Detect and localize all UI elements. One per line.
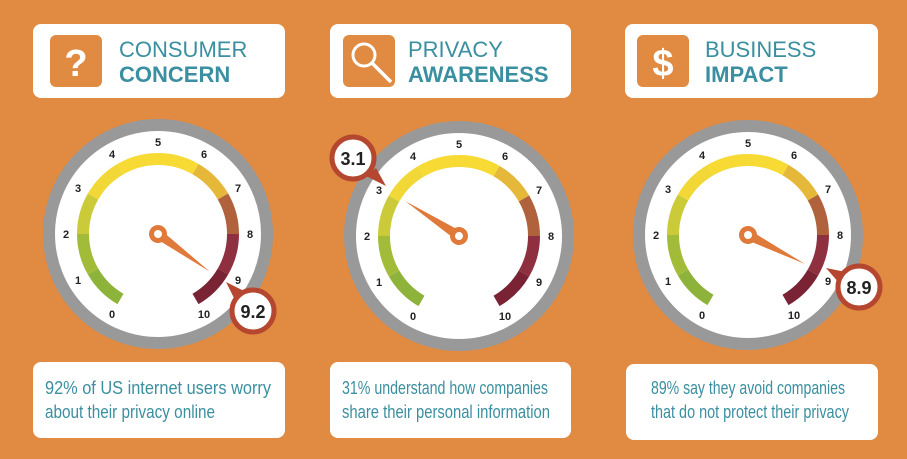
icon: magnifier <box>343 35 395 87</box>
heading: consumer concern <box>33 24 285 98</box>
text: consumer concern: 92% of US internet users worry <box>45 378 271 398</box>
callout: 8.9 <box>826 266 880 308</box>
heading: privacy awareness: PRIVACY <box>408 37 503 62</box>
heading: consumer concern: CONCERN <box>119 62 230 87</box>
text: consumer concern <box>33 362 285 438</box>
needle <box>145 221 215 279</box>
text: consumer concern: about their privacy online <box>45 402 215 422</box>
heading: consumer concern: CONSUMER <box>119 37 247 62</box>
callout: 9.2: 9.2 <box>240 302 266 322</box>
heading: privacy awareness <box>330 24 571 98</box>
text: business impact: that do not protect their privacy <box>651 402 849 422</box>
callout: 3.1 <box>332 137 386 186</box>
needle <box>400 194 471 248</box>
callout: 3.1: 3.1 <box>340 149 366 169</box>
needle <box>736 223 809 272</box>
heading: business impact: BUSINESS <box>705 37 816 62</box>
icon: question mark: ? <box>64 43 88 85</box>
icon: dollar: $ <box>652 43 674 85</box>
text: privacy awareness <box>330 362 571 438</box>
heading: business impact <box>625 24 878 98</box>
text: privacy awareness: share their personal information <box>342 402 550 422</box>
icon: question mark <box>50 35 102 87</box>
callout: 9.2 <box>226 282 274 332</box>
gauge: 9.2 <box>49 125 267 343</box>
callout: 8.9: 8.9 <box>846 278 872 298</box>
panel: consumer concern <box>33 24 285 438</box>
heading: privacy awareness: AWARENESS <box>408 62 549 87</box>
panel: privacy awareness <box>330 24 571 438</box>
icon: dollar <box>637 35 689 87</box>
gauge: 8.9 <box>639 126 857 344</box>
gauge: 3.1 <box>350 127 568 345</box>
text: business impact: 89% say they avoid companies <box>651 378 845 398</box>
panel: business impact <box>625 24 880 440</box>
heading: business impact: IMPACT <box>705 62 788 87</box>
text: privacy awareness: 31% understand how companies <box>342 378 548 398</box>
text: business impact <box>626 364 878 440</box>
